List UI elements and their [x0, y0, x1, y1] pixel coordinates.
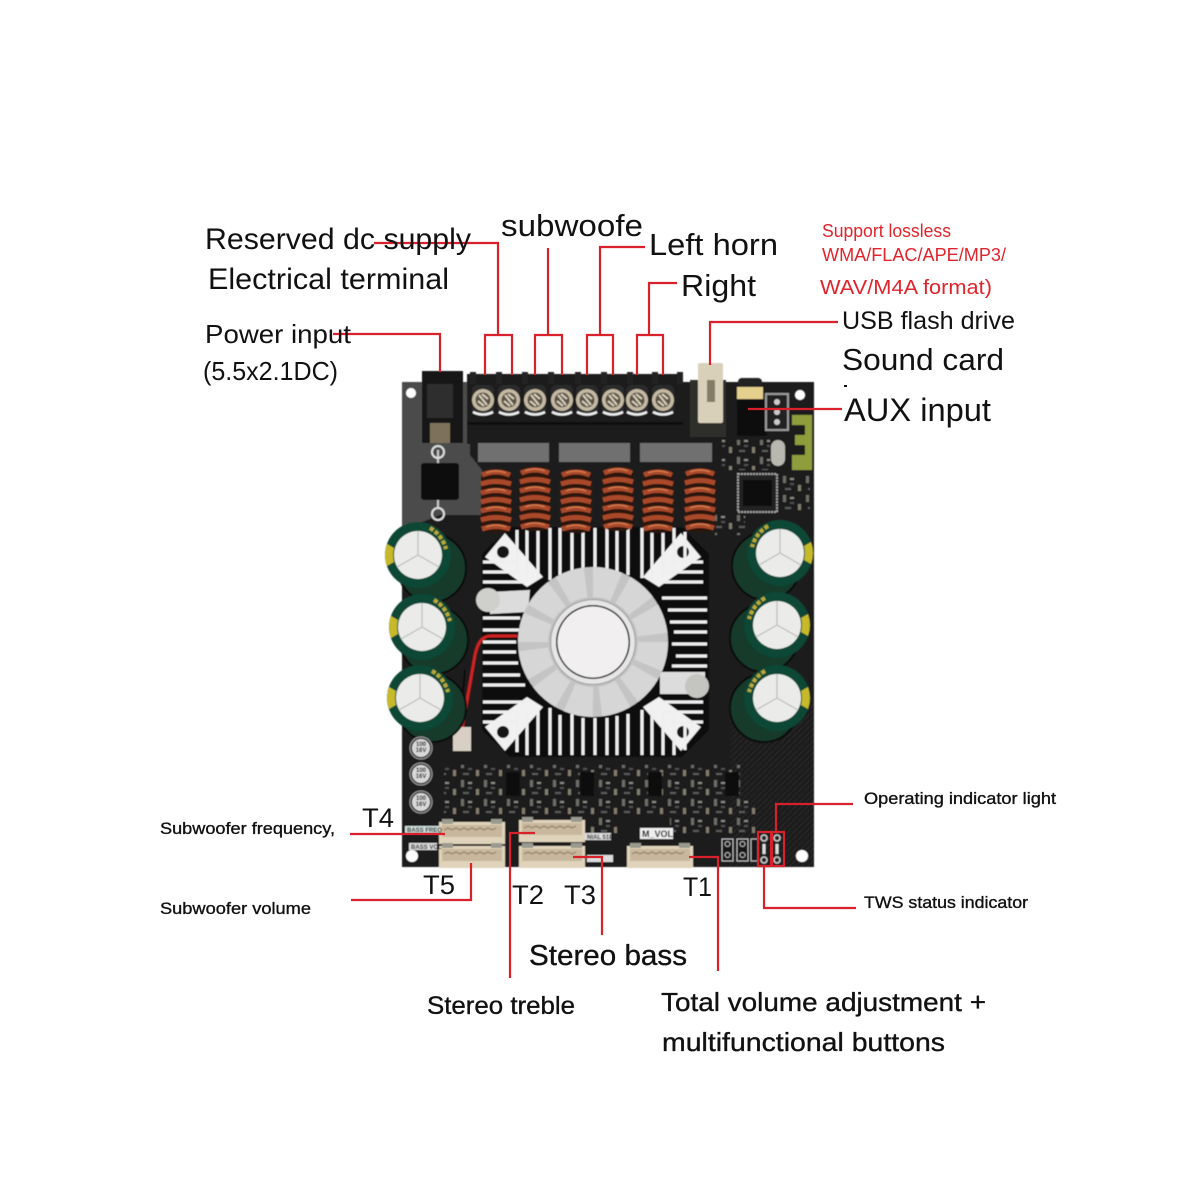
- label: AUX input: AUX input: [844, 392, 991, 428]
- silkscreen labels: BASS FREQ: [407, 828, 442, 834]
- label: T4: T4: [362, 803, 394, 833]
- grey choke mounts: [478, 443, 712, 462]
- callout lines: [333, 243, 856, 978]
- note: supported formats: WMA/FLAC/APE/MP3/: [822, 245, 1006, 265]
- label: sound card: Sound card: [842, 342, 1004, 377]
- line: right: [637, 283, 677, 375]
- terminal block: [467, 372, 683, 444]
- line: subwoofer frequency: [350, 833, 445, 835]
- label: T2: T2: [512, 880, 544, 910]
- line: subwoofer volume: [351, 863, 471, 900]
- heatsink fins: [517, 528, 685, 580]
- header pins: [722, 839, 758, 861]
- DC power jack: [422, 371, 463, 443]
- line: stereo bass: [573, 857, 602, 935]
- note: supported formats: WAV/M4A format): [820, 277, 992, 299]
- silkscreen labels: M_VOL: [642, 829, 674, 839]
- diode: [421, 446, 459, 520]
- line: TWS status indicator: [758, 832, 856, 908]
- board base: [402, 382, 814, 867]
- traces texture: [730, 700, 814, 867]
- line: reserved dc supply: [374, 243, 512, 375]
- bluetooth antenna: [792, 415, 812, 470]
- fan hub: [550, 600, 636, 684]
- stray mark under sound card: [844, 385, 847, 387]
- label: T1: T1: [683, 872, 712, 902]
- small surface mount components: [444, 765, 755, 835]
- left capacitors: [385, 522, 468, 742]
- ribbon connectors: [439, 817, 693, 868]
- line: subwoofer: [535, 248, 562, 375]
- label: total volume adjustment: Total volume adjustment +: [661, 987, 986, 1017]
- small electrolytic capacitors: [410, 737, 432, 813]
- indicator LED pads: [761, 835, 780, 863]
- heatsink corners: [483, 533, 543, 587]
- line: left horn: [587, 247, 645, 375]
- line: USB flash drive: [710, 322, 838, 365]
- AUX jack and module: [737, 378, 788, 436]
- label: power spec: (5.5x2.1DC): [203, 356, 338, 386]
- label: stereo treble: Stereo treble: [427, 992, 575, 1020]
- label: subwoofer frequency: Subwoofer frequency,: [160, 819, 335, 838]
- white posts: [476, 588, 500, 612]
- mounting holes: [406, 388, 808, 862]
- silkscreen labels: NIAL 51E: [587, 835, 613, 841]
- label: USB flash drive: USB flash drive: [842, 307, 1015, 335]
- note: supported formats: [820, 221, 1006, 299]
- label: operating indicator light: Operating indicator light: [864, 789, 1056, 808]
- note: supported formats: Support lossless: [822, 221, 951, 241]
- right capacitors: [730, 520, 813, 742]
- silkscreen labels: [405, 826, 674, 862]
- line: power input: [333, 334, 440, 372]
- label: T5: T5: [423, 870, 455, 900]
- USB port: [690, 363, 726, 437]
- crystal: [771, 440, 785, 466]
- label: left horn: Left horn: [649, 227, 778, 262]
- fan wires: [459, 636, 517, 735]
- label: subwoofer: subwoofe: [501, 208, 643, 243]
- label: subwoofer volume: Subwoofer volume: [160, 899, 311, 918]
- label: electrical terminal: Electrical terminal: [208, 263, 449, 296]
- label: right: Right: [681, 268, 756, 303]
- mounting arms: [490, 590, 705, 694]
- heatsink base: [482, 527, 709, 757]
- line: stereo treble: [510, 833, 535, 978]
- label: stereo bass: Stereo bass: [529, 940, 687, 972]
- silkscreen labels: BASS VOL: [411, 845, 442, 851]
- circuit board: [385, 363, 814, 868]
- line: total volume: [689, 857, 718, 971]
- reflective grey board corner: [402, 382, 482, 530]
- label: multifunctional buttons: multifunctional buttons: [662, 1027, 945, 1057]
- copper inductor coils: [481, 467, 715, 533]
- label: reserved dc supply: Reserved dc supply: [205, 223, 471, 256]
- line: operating indicator light: [772, 804, 853, 866]
- label: TWS status indicator: TWS status indicator: [864, 893, 1028, 912]
- top right small components: [722, 440, 770, 470]
- fan connector: [453, 727, 471, 751]
- label: power input: Power input: [205, 319, 352, 349]
- heatsink and fan: [476, 527, 709, 757]
- main chip: [738, 474, 777, 512]
- fan blades: [518, 567, 668, 717]
- label: T3: T3: [564, 880, 596, 910]
- line: AUX input: [748, 408, 842, 410]
